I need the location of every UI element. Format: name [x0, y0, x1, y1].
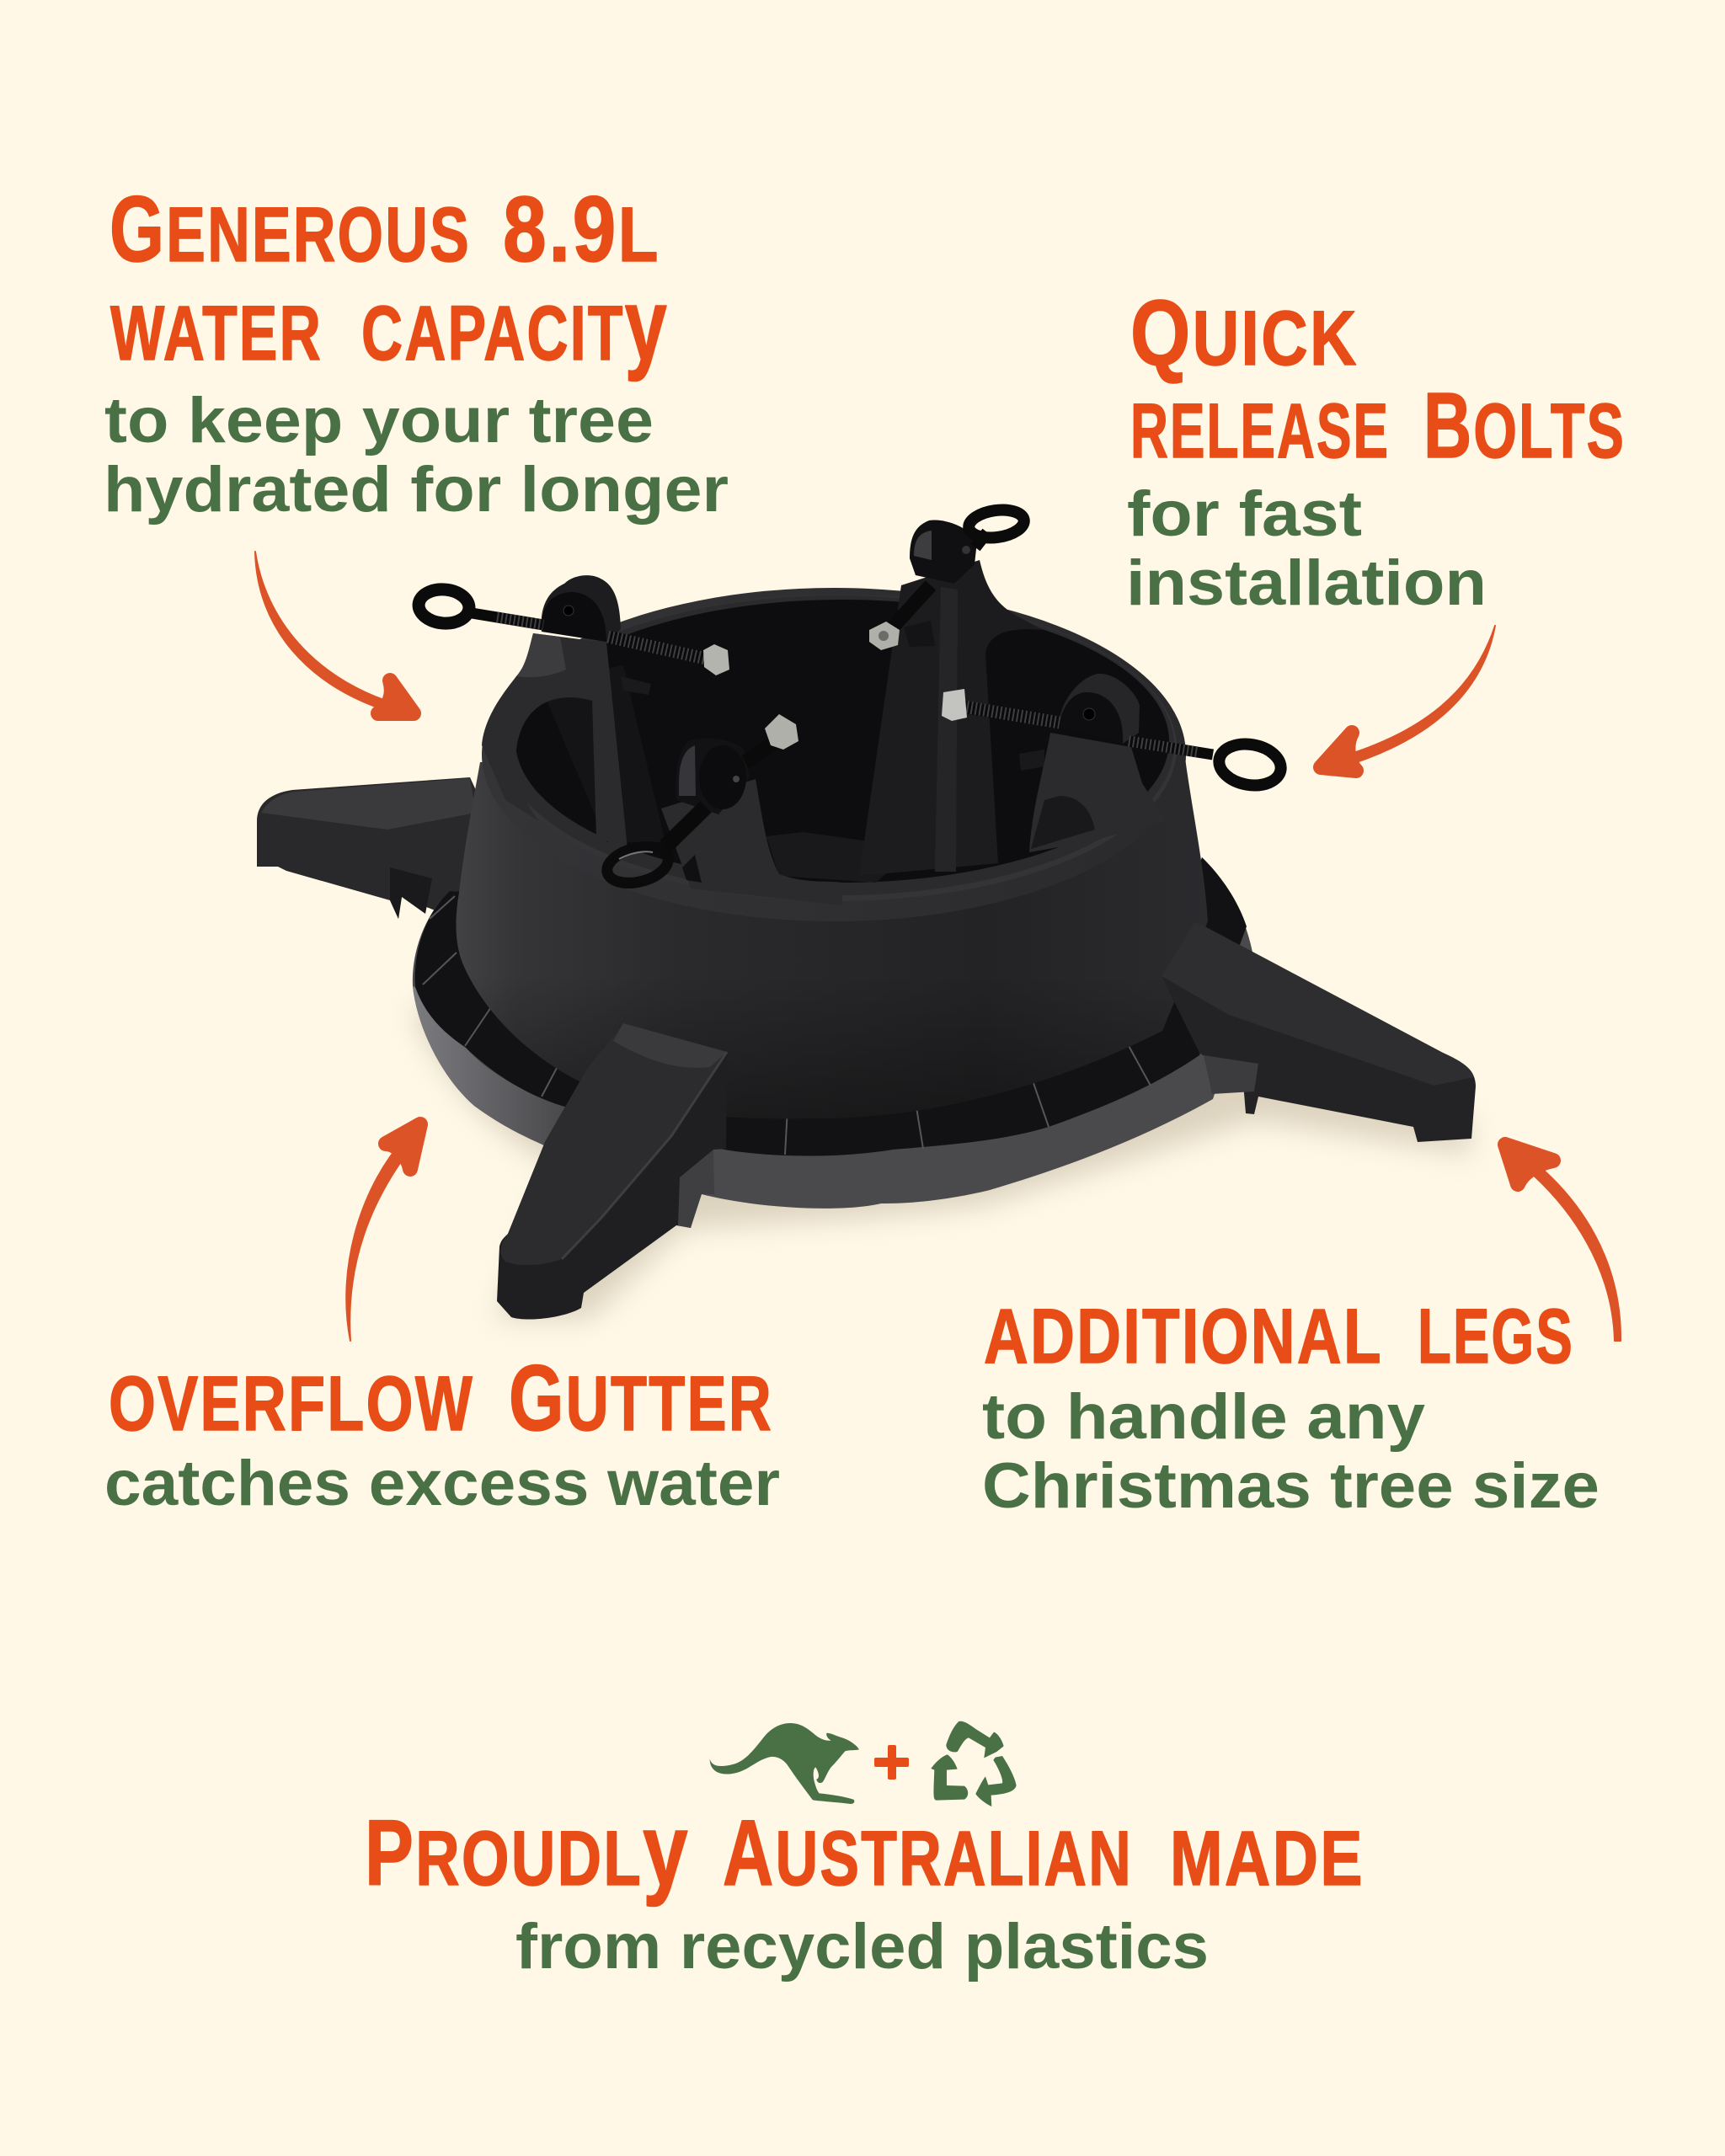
heading: proudly Australian made — [365, 1792, 1365, 1907]
arrow: to additional legs — [1505, 1145, 1621, 1341]
heading: generous 8.9L water capacity: GENEROUS — [109, 178, 471, 281]
back-left bolt post — [417, 575, 729, 849]
heading: proudly Australian made: PROUDLy — [365, 1792, 690, 1907]
back-left leg — [257, 777, 484, 921]
front-right bolt post — [942, 674, 1284, 852]
text: for fast installation — [1126, 478, 1487, 619]
text: to handle any Christmas tree size — [982, 1381, 1599, 1522]
heading: proudly Australian made: MADE — [1170, 1816, 1365, 1902]
icon: plus — [874, 1745, 909, 1780]
callout: additional legs — [982, 1294, 1599, 1522]
heading: quick release bolts: QUICK — [1130, 281, 1359, 385]
heading: overflow gutter: GUTTER — [509, 1347, 773, 1450]
text: catches excess water: catches excess water — [104, 1448, 780, 1519]
heading: quick release bolts: RELEASE — [1130, 388, 1390, 474]
text: to keep your tree hydrated for longer: hydrated for longer — [104, 454, 729, 526]
heading: quick release bolts: BOLTS — [1423, 374, 1626, 478]
icon: kangaroo — [710, 1723, 859, 1804]
gutter ribs — [423, 896, 1151, 1155]
badge: Australian made and recycled icons — [710, 1721, 1017, 1806]
heading: quick release bolts — [1130, 281, 1626, 478]
rim — [482, 588, 1186, 921]
bowl body — [456, 758, 1208, 1118]
text: for fast installation: for fast — [1127, 478, 1362, 550]
text: for fast installation: installation — [1126, 547, 1487, 619]
text: to keep your tree hydrated for longer: to keep your tree — [104, 385, 654, 456]
heading: generous 8.9L water capacity: CAPACITy — [361, 267, 669, 382]
interior — [515, 600, 1169, 883]
callout: water capacity — [104, 178, 729, 526]
heading: additional legs: ADDITIONAL — [984, 1294, 1383, 1380]
heading: generous 8.9L water capacity: 8.9L — [503, 178, 660, 281]
heading: overflow gutter — [109, 1347, 773, 1450]
text: to handle any Christmas tree size: to handle any — [982, 1381, 1425, 1453]
text: from recycled plastics: from recycled plastics — [515, 1911, 1209, 1983]
back-right bolt post — [859, 507, 1043, 876]
overflow gutter — [413, 857, 1255, 1209]
front leg — [497, 1023, 727, 1320]
arrow: to overflow gutter — [346, 1124, 420, 1341]
callout: quick release bolts — [1126, 281, 1626, 619]
product photo: tree stand illustration — [257, 507, 1476, 1320]
shadow — [413, 994, 1470, 1318]
arrow: to water capacity — [255, 552, 414, 713]
heading: proudly Australian made: AUSTRALIAN — [723, 1801, 1133, 1905]
callout: overflow gutter — [104, 1347, 780, 1519]
heading: generous 8.9L water capacity: WATER — [110, 291, 323, 376]
icon: recycling symbol — [931, 1721, 1017, 1806]
front-left bolt post — [603, 714, 842, 905]
heading: overflow gutter: OVERFLOW — [109, 1361, 474, 1447]
base floor detail — [766, 832, 893, 883]
text: to handle any Christmas tree size: Christmas tree size — [982, 1450, 1599, 1522]
heading: additional legs: LEGS — [1418, 1294, 1574, 1380]
right leg — [1162, 921, 1476, 1142]
text: to keep your tree hydrated for longer — [104, 385, 729, 526]
heading: generous 8.9L water capacity — [109, 178, 669, 382]
arrow: to quick release bolts — [1321, 626, 1495, 771]
